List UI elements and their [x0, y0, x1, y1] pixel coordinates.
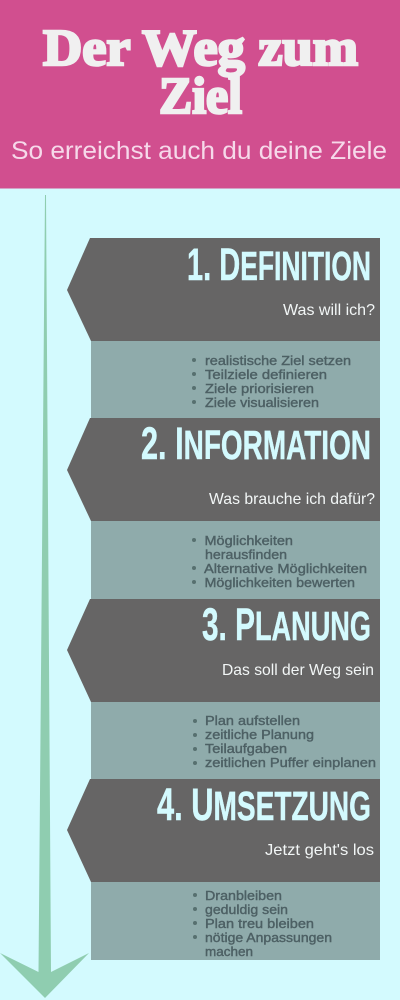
panel shape: arrow banner 3 [67, 599, 380, 702]
panel shape: arrow banner 1 [67, 238, 380, 341]
subheading: Das soll der Weg sein: Das soll der Weg sein [222, 662, 374, 679]
panel shape: arrow banner 4 [67, 779, 380, 882]
list panel 3: zeitliche Planung [205, 727, 314, 742]
list panel 1: Ziele priorisieren [205, 381, 314, 396]
list panel 2: herausfinden [205, 547, 287, 562]
subtitle: So erreichst auch du deine Ziele [11, 137, 387, 165]
title: Der Weg zum [43, 20, 358, 77]
list panel 4: geduldig sein [205, 902, 288, 917]
list panel 3: zeitlichen Puffer einplanen [205, 755, 376, 770]
list panel 3: Teilaufgaben [205, 741, 287, 756]
panel: 2. Information [67, 418, 380, 599]
list panel 2: Möglichkeiten [204, 533, 293, 548]
list panel 3 [91, 702, 380, 779]
panel: 4. Umsetzung [67, 779, 380, 960]
list panel 4: machen [205, 944, 253, 959]
list panel 4: Dranbleiben [205, 888, 282, 903]
list panel 2: Alternative Möglichkeiten [204, 561, 367, 576]
subheading: Was will ich?: Was will ich? [283, 302, 375, 319]
list panel 1: Teilziele definieren [205, 367, 327, 382]
title: Ziel [159, 68, 242, 125]
list panel 3: Plan aufstellen [205, 713, 300, 728]
title [43, 20, 358, 125]
panel: 3. Planung [67, 599, 380, 779]
subheading: Was brauche ich dafür?: Was brauche ich dafür? [209, 491, 375, 508]
subheading: Jetzt geht's los: Jetzt geht's los [265, 842, 374, 859]
list panel 2: Möglichkeiten bewerten [204, 575, 355, 590]
list panel 1: realistische Ziel setzen [205, 353, 351, 368]
list panel 1 [91, 341, 380, 418]
list panel 2 [91, 521, 380, 599]
list panel 4 [91, 882, 380, 960]
list panel 1: Ziele visualisieren [205, 395, 319, 410]
arrow: path downward to goal [0, 195, 89, 998]
header banner [0, 0, 400, 188]
list panel 4: nötige Anpassungen [205, 930, 332, 945]
panel: 1. Definition [67, 238, 380, 418]
list panel 4: Plan treu bleiben [205, 916, 314, 931]
panel shape: arrow banner 2 [67, 418, 380, 521]
